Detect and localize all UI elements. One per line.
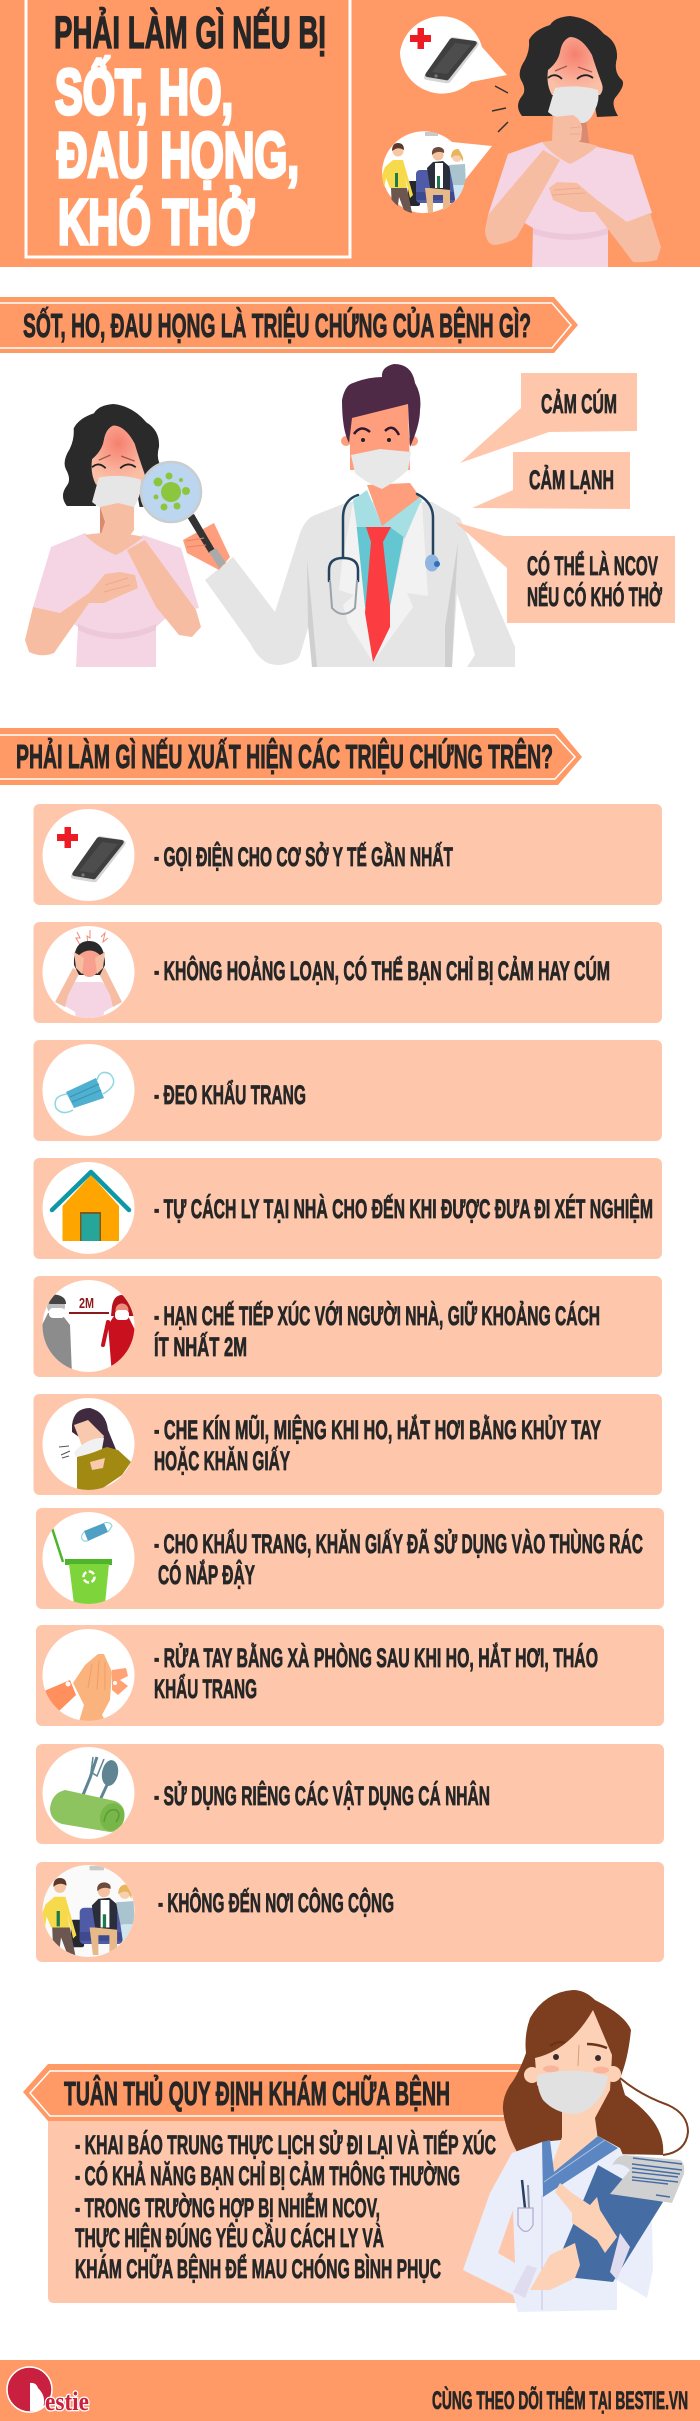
- magnifying glass with virus: [141, 462, 230, 570]
- face: [524, 2067, 540, 2083]
- doctor coat: [205, 502, 515, 667]
- card: wear a mask: [34, 1040, 662, 1141]
- card: wash hands: KHẨU TRANG: [154, 1673, 257, 1704]
- head: [341, 364, 420, 489]
- lapels: [339, 502, 428, 662]
- doctor: [205, 364, 515, 667]
- hands and cuffs: [555, 2183, 617, 2253]
- card: do not panic: [34, 922, 662, 1023]
- icon: surgical mask: [55, 1072, 114, 1113]
- card: keep 2m distance: ÍT NHẤT 2M: [154, 1331, 247, 1362]
- speech bubble: phone: [400, 16, 507, 94]
- card: call health facility: [34, 804, 662, 905]
- mask: [537, 2071, 608, 2114]
- tie: [365, 527, 391, 662]
- speech bubble: people: [382, 131, 492, 213]
- callout: cold: [472, 452, 630, 509]
- card: cover nose and mouth: [34, 1394, 662, 1495]
- card: dispose in lidded bin: [36, 1508, 664, 1609]
- title: KHÓ THỞ: [58, 185, 254, 258]
- cough marks: [492, 86, 508, 132]
- logo: estie: [45, 2387, 89, 2416]
- icon: group of people: [42, 1866, 135, 1955]
- callout: nCoV: [455, 522, 675, 623]
- title: SỐT, HO,: [55, 56, 233, 128]
- icon: phone and red cross: [57, 827, 126, 882]
- paper: [610, 2155, 684, 2203]
- icon: recycling bin and mask: [52, 1522, 112, 1604]
- footer band: [0, 2360, 700, 2421]
- card: call health facility: - GỌI ĐIỆN CHO CƠ SỞ Y TẾ GẦN NHẤT: [154, 840, 453, 872]
- pocket and pens: [522, 2180, 525, 2208]
- list text: KHÁM CHỮA BỆNH ĐỂ MAU CHÓNG BÌNH PHỤC: [75, 2253, 441, 2284]
- card: wash hands: [36, 1625, 664, 1726]
- header band: [0, 0, 700, 275]
- hair: [503, 1990, 663, 2155]
- card: dispose in lidded bin: CÓ NẮP ĐẬY: [158, 1559, 255, 1590]
- woman with mask: [25, 404, 201, 667]
- clipboard: [557, 2165, 663, 2282]
- panel: follow medical rules: [23, 2064, 530, 2303]
- card: keep 2m distance: 2M: [79, 1295, 94, 1312]
- icon: house: [52, 1172, 129, 1241]
- coat: [463, 2136, 653, 2312]
- card: avoid public places: [36, 1862, 664, 1962]
- icon: fork, spoon and towel: [50, 1757, 128, 1834]
- callout: flu: CẢM CÚM: [541, 387, 617, 419]
- section banner: what to do: [0, 728, 582, 785]
- card: keep 2m distance: [34, 1276, 662, 1377]
- title frame: [26, 0, 350, 257]
- callout: flu: [460, 373, 637, 463]
- title: [54, 7, 326, 258]
- banner heading: [23, 2064, 530, 2121]
- coughing woman: [485, 16, 661, 275]
- collar: [542, 2136, 618, 2197]
- list text: [75, 2128, 496, 2284]
- logo: [7, 2367, 89, 2416]
- list text: - TRONG TRƯỜNG HỢP BỊ NHIỄM NCOV,: [75, 2192, 380, 2223]
- icon: person sneezing into tissue: [59, 1408, 131, 1490]
- callout: cold: CẢM LẠNH: [529, 463, 614, 495]
- nurse holding clipboard: [463, 1990, 688, 2312]
- card: avoid public places: - KHÔNG ĐẾN NƠI CÔNG CỘNG: [158, 1887, 394, 1918]
- card: wear a mask: - ĐEO KHẨU TRANG: [154, 1079, 306, 1110]
- icon: two people 2m apart: [42, 1295, 135, 1375]
- stethoscope: [329, 494, 440, 614]
- card: personal items: [36, 1744, 664, 1844]
- icon: woman with headache: [55, 930, 122, 1020]
- title: PHẢI LÀM GÌ NẾU BỊ: [54, 7, 326, 58]
- card: self-isolate at home: [34, 1158, 662, 1259]
- neck and shirt: [355, 527, 405, 607]
- list text: THỰC HIỆN ĐÚNG YÊU CẦU CÁCH LY VÀ: [75, 2222, 384, 2253]
- card: cover nose and mouth: HOẶC KHĂN GIẤY: [154, 1445, 290, 1476]
- title: ĐAU HỌNG,: [57, 119, 299, 191]
- section banner: symptoms: [0, 297, 578, 353]
- icon: washing hands: [42, 1654, 128, 1725]
